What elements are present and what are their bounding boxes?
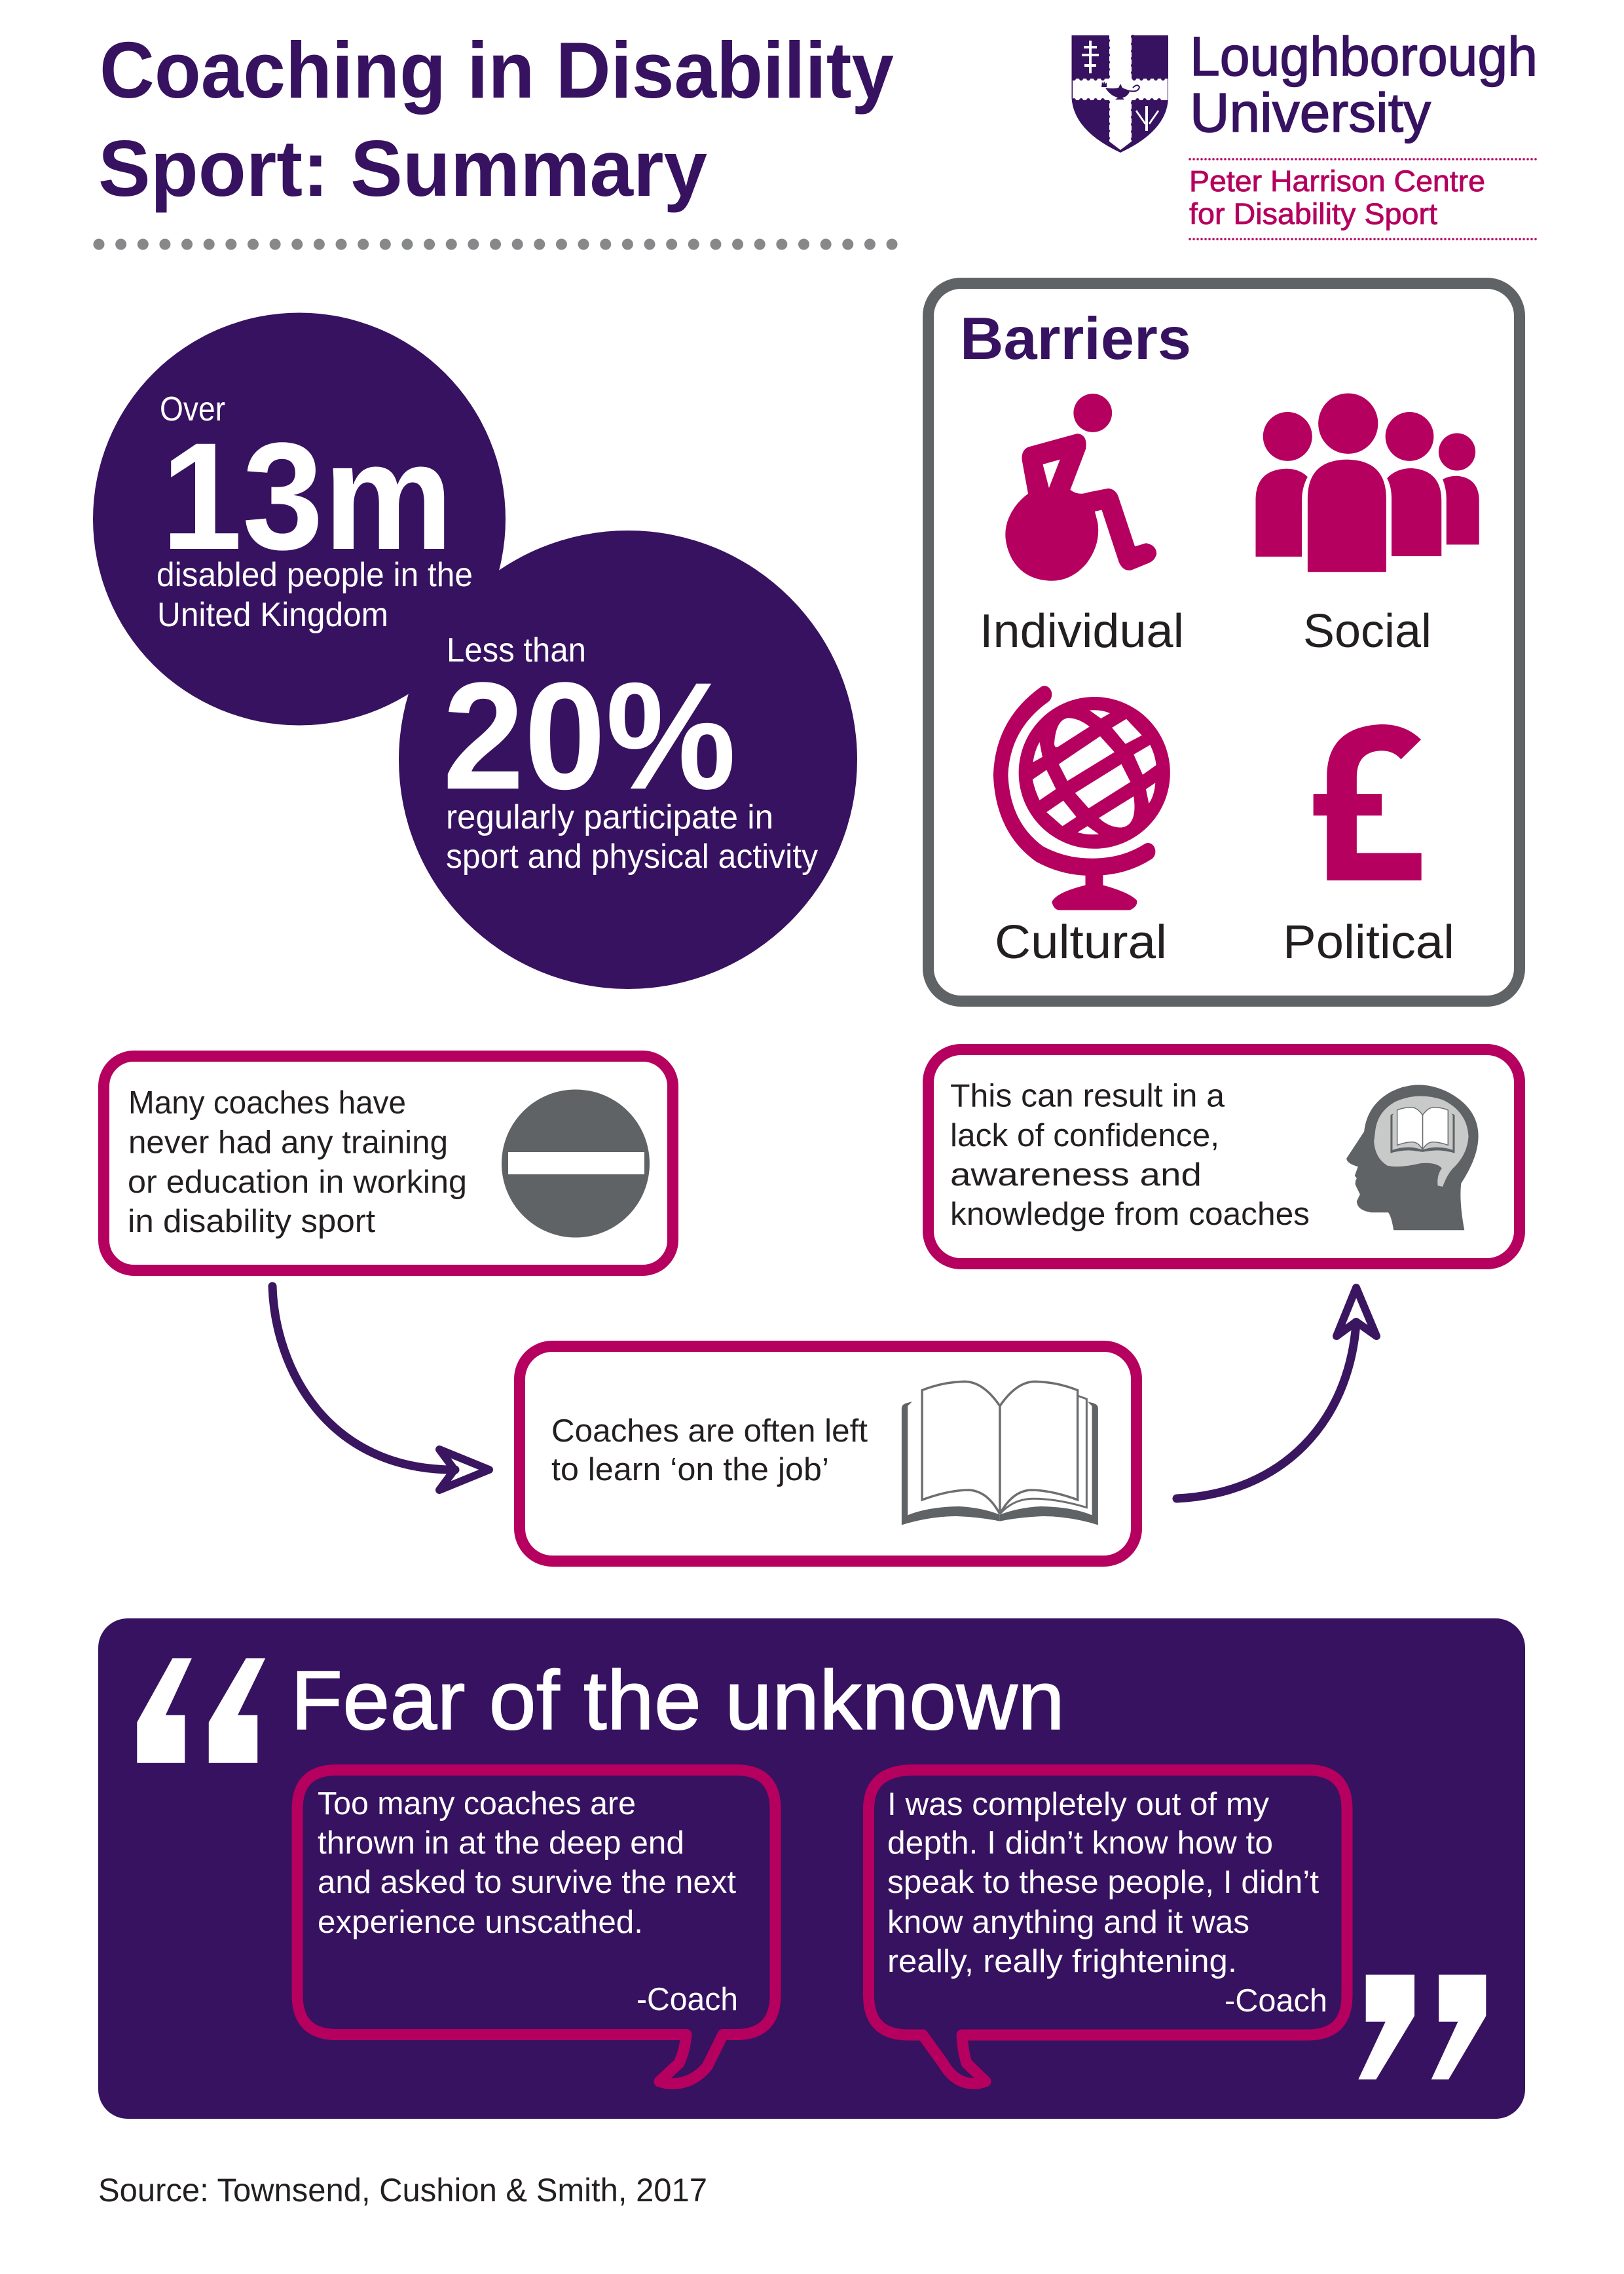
icon: group of people [1256, 393, 1479, 572]
label: Cultural: Cultural [995, 916, 1167, 969]
stat: 13m disabled people: 13m [161, 411, 453, 582]
text: on the job [551, 1413, 868, 1487]
title [98, 26, 894, 213]
quote text two: depth. I didn’t know how to [887, 1825, 1273, 1861]
logo: Loughborough University: University [1190, 82, 1431, 143]
quote text one [318, 1786, 738, 2017]
label: Social: Social [1303, 605, 1431, 658]
text: lack of confidence: This can result in a [950, 1078, 1225, 1113]
title: Sport: Summary [98, 124, 707, 213]
stat: 13m disabled people: Over [160, 390, 225, 428]
text: on the job: Coaches are often left [551, 1413, 868, 1449]
quote text two: speak to these people, I didn’t [887, 1865, 1319, 1900]
quote text one: Too many coaches are [318, 1786, 636, 1821]
quote text one: -Coach [637, 1982, 738, 2017]
quote text two: know anything and it was [887, 1905, 1249, 1940]
icon: wheelchair user [1005, 394, 1156, 581]
logo: Loughborough University: Loughborough [1190, 26, 1538, 87]
source citation: Source: Townsend, Cushion & Smith, 2017 [98, 2172, 707, 2209]
stat: 20% participation: 20% [443, 651, 736, 821]
text: lack of confidence: lack of confidence, [950, 1118, 1219, 1153]
quote text two: really, really frightening. [887, 1944, 1237, 1979]
logo: Loughborough University: for Disability Sport [1189, 197, 1438, 231]
label: Individual: Individual [980, 605, 1184, 658]
heading: Barriers: Barriers [960, 306, 1191, 372]
text: no training [128, 1085, 467, 1239]
icon: opening quotation mark [137, 1658, 265, 1763]
title: Coaching in Disability [100, 26, 894, 115]
panel: statistics circles [93, 313, 857, 989]
stat: 20% participation [443, 631, 818, 876]
text: lack of confidence: knowledge from coaches [950, 1197, 1310, 1232]
text: lack of confidence [950, 1078, 1310, 1232]
stat: 13m disabled people: United Kingdom [157, 596, 388, 634]
logo: Loughborough University: Peter Harrison Centre [1189, 164, 1485, 198]
quote text one: thrown in at the deep end [318, 1825, 684, 1861]
text: on the job: to learn ‘on the job’ [551, 1452, 829, 1487]
icon: pound sign [1314, 724, 1422, 880]
icon: closing quotation mark [1358, 1975, 1486, 2079]
text: no training: never had any training [128, 1125, 448, 1161]
box: lack of confidence [929, 1049, 1519, 1264]
icon: open book [902, 1381, 1098, 1525]
icon: globe [1001, 694, 1170, 910]
box: learn on the job [520, 1347, 1137, 1561]
stat: 20% participation: Less than [447, 631, 586, 669]
stat: 13m disabled people [157, 390, 473, 634]
panel: barriers [929, 283, 1519, 1001]
box: coaches never trained [103, 1056, 673, 1271]
heading: Fear of the unknown: Fear of the unknown [291, 1654, 1065, 1747]
text: no training: or education in working [128, 1165, 467, 1200]
text: no training: in disability sport [128, 1204, 375, 1239]
quote text two [887, 1787, 1327, 2019]
speech bubble: coach quote two [868, 1770, 1347, 2083]
arrow: on the job to lack of confidence [1177, 1288, 1376, 1499]
arrow: training to on the job [272, 1286, 489, 1490]
icon: no entry sign [502, 1090, 650, 1238]
text: lack of confidence: awareness and [950, 1157, 1202, 1193]
quote text one: experience unscathed. [318, 1905, 643, 1940]
stat: 20% participation: sport and physical activity [446, 838, 818, 876]
label: Political: Political [1283, 916, 1454, 969]
panel: fear of the unknown [98, 1618, 1525, 2119]
icon: head with book [1346, 1085, 1479, 1230]
quote text two: -Coach [1225, 1983, 1327, 2019]
stat: 13m disabled people: disabled people in the [157, 556, 473, 594]
quote text one: and asked to survive the next [318, 1865, 736, 1900]
speech bubble: coach quote one [297, 1770, 775, 2083]
stat: 20% participation: regularly participate in [446, 798, 773, 836]
logo: Loughborough University [1071, 26, 1538, 239]
quote text two: I was completely out of my [887, 1787, 1269, 1822]
text: no training: Many coaches have [128, 1085, 406, 1121]
